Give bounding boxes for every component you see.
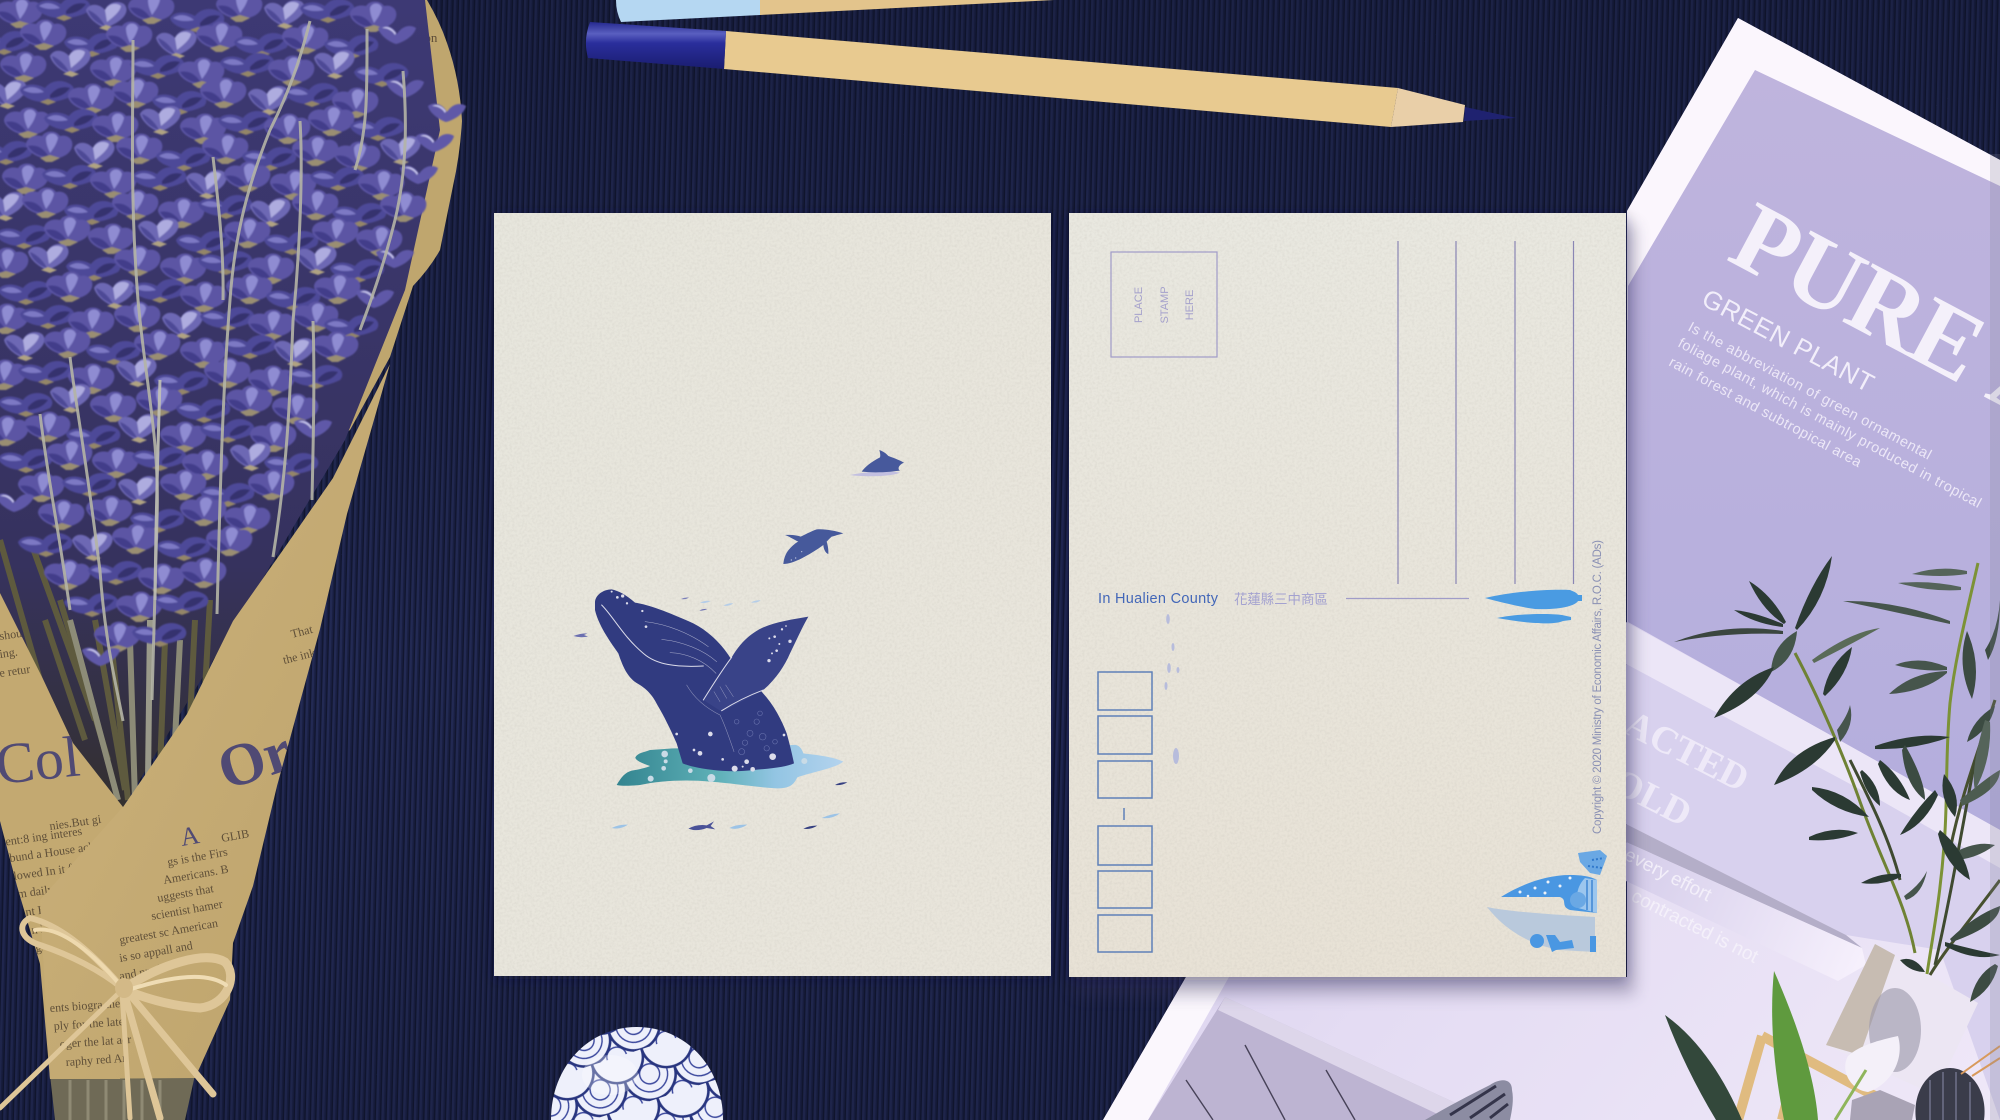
grey candle: [1850, 1090, 1915, 1120]
wrap: right fold: the ink: [281, 645, 317, 667]
floorboard picture: [1148, 997, 1456, 1120]
magazine paragraph: Is the abbreviation of green ornamental: [1685, 319, 1934, 463]
wrap: left fold: bund a House ack: [8, 839, 95, 865]
faint stray marks: [1164, 614, 1180, 764]
water splash spots: [648, 751, 807, 782]
dark stem mass: [0, 0, 440, 807]
corner figure illustration: [1487, 850, 1607, 952]
wrap: right fold: [40, 364, 390, 1079]
bottom foliage: dark leaf: [1665, 1015, 1742, 1120]
wrap: left fold: [0, 593, 123, 1079]
leaping dolphin: [783, 529, 843, 564]
postal code boxes: [1098, 672, 1152, 952]
stamp box: HERE: [1184, 290, 1196, 320]
shelf text lines: s every effort: [1608, 838, 1715, 906]
wrap: right fold: uggests that: [156, 881, 215, 905]
small white spots on dolphin: [791, 551, 802, 561]
postcard: front with whale: [494, 213, 1051, 976]
wall text: ACTED OLD: OLD: [1606, 761, 1698, 835]
lavender bouquet: [0, 0, 466, 1120]
pencil: light blue cap, top: [616, 0, 1054, 22]
humpback body: [595, 589, 794, 771]
stems over the flowers: [40, 21, 405, 721]
ceramic ball with wave pattern: [551, 1027, 723, 1120]
white shelf: [1626, 842, 1866, 981]
wrap: left fold: n House gre: [30, 915, 90, 937]
magazine paragraph: rain forest and subtropical area: [1666, 354, 1865, 471]
whale illustration: [573, 450, 904, 830]
wrap: left fold: nies.But gi: [48, 812, 103, 833]
potted plant in magazine photo: [1665, 556, 2000, 1120]
wrap: right fold: A: [178, 820, 202, 852]
lavender florets: [0, 0, 466, 666]
wrap: right fold: raphy red An: [65, 1051, 129, 1069]
horizontal rule: [1346, 598, 1469, 600]
wrap: left fold: greatest sc: [34, 934, 86, 955]
moulding band: [1626, 622, 2000, 868]
wall text: ACTED OLD: [1606, 703, 1756, 835]
kraft newspaper wrap: back sheet: me. on: [402, 30, 438, 45]
stamp box: STAMP: [1159, 286, 1171, 324]
wrap: right fold: ply for the late: [53, 1014, 124, 1033]
shelf text lines: contracted is not: [1628, 886, 1762, 968]
small fish group: [573, 597, 847, 830]
wrap: right fold: That: [289, 622, 315, 641]
stamp box: PLACE: [1133, 287, 1145, 323]
silver ornament: [1425, 1080, 1513, 1120]
dark ribbed pot and sticks: [1915, 1046, 2000, 1120]
kraft newspaper wrap: back sheet: for the rare a: [345, 0, 412, 15]
magazine: upper page: [1627, 18, 2000, 830]
edge strip overlay: [1990, 154, 2000, 1120]
headline: PURE: PURE: [1715, 180, 2000, 404]
kraft newspaper wrap: back sheet: we: [415, 57, 429, 71]
wrap: left fold: lowed In it for so: [12, 858, 96, 883]
blue leaf shapes: [1485, 590, 1582, 623]
address label chinese: 花蓮縣三中商區: [1234, 592, 1328, 607]
shelf text lines: [1608, 838, 1762, 968]
magazine: lower page interior photo: [1103, 622, 2000, 1120]
wrap: right fold: gs is the Firs: [166, 845, 229, 869]
wrap: left fold: m daily or this crack: [16, 873, 116, 901]
pot: [1826, 944, 1978, 1095]
wrap: left fold: rent:8 ing interes: [0, 824, 83, 849]
stool: [1738, 1036, 1905, 1120]
stalks below the wrap: [50, 1075, 195, 1120]
white flower: [1835, 1036, 1900, 1120]
pectoral fin: [703, 617, 808, 712]
magazine: base page: [1103, 18, 2000, 1120]
soft shadow under postcards: [1075, 225, 1635, 995]
stamp box: [1111, 252, 1217, 357]
whale highlights: [602, 605, 763, 752]
kraft newspaper wrap: back sheet: [0, 0, 462, 520]
postcard: back with address side: [1069, 213, 1626, 977]
shadow strip: [1626, 824, 1862, 948]
sea splash: [617, 745, 843, 788]
wrap: right fold: Or: [210, 717, 300, 802]
wrap: right fold: oger the lat acr: [59, 1032, 132, 1051]
wrap: right fold: ents biogra the: [49, 996, 121, 1015]
wrap: right fold: GLIB: [220, 826, 250, 845]
whale spots: [611, 591, 792, 772]
barnacle rings: [734, 711, 777, 755]
lower dried stems: [0, 540, 210, 800]
pencil: dark blue cap: [586, 22, 1516, 127]
address label english: In Hualien County: [1098, 591, 1219, 607]
wrap: right fold: scientist hamer: [150, 897, 224, 923]
wrap: right fold: Americans. B: [162, 862, 230, 887]
raffia bow: [0, 918, 231, 1118]
surfacing dolphin: [850, 450, 904, 476]
wrap: right fold: is so appall and: [118, 938, 194, 965]
magazine paragraph: foliage plant, which is mainly produced in tropical: [1675, 335, 1984, 512]
wrap: right fold: greatest sc American: [118, 916, 219, 947]
wall text: ACTED OLD: ACTED: [1618, 703, 1756, 800]
bottom foliage: green leaf: [1772, 971, 1818, 1120]
wrap: right fold: and prod: [118, 962, 162, 983]
copyright line: Copyright © 2020 Ministry of Economic Affairs, R.O.C. (ADs): [1592, 540, 1604, 834]
wrap: left fold: nt Ho The spe: [24, 896, 93, 919]
subhead: GREEN PLANT: GREEN PLANT: [1697, 283, 1879, 398]
stems: [1795, 563, 2000, 975]
leaves: [1674, 556, 2000, 1002]
address lines: [1398, 241, 1574, 584]
